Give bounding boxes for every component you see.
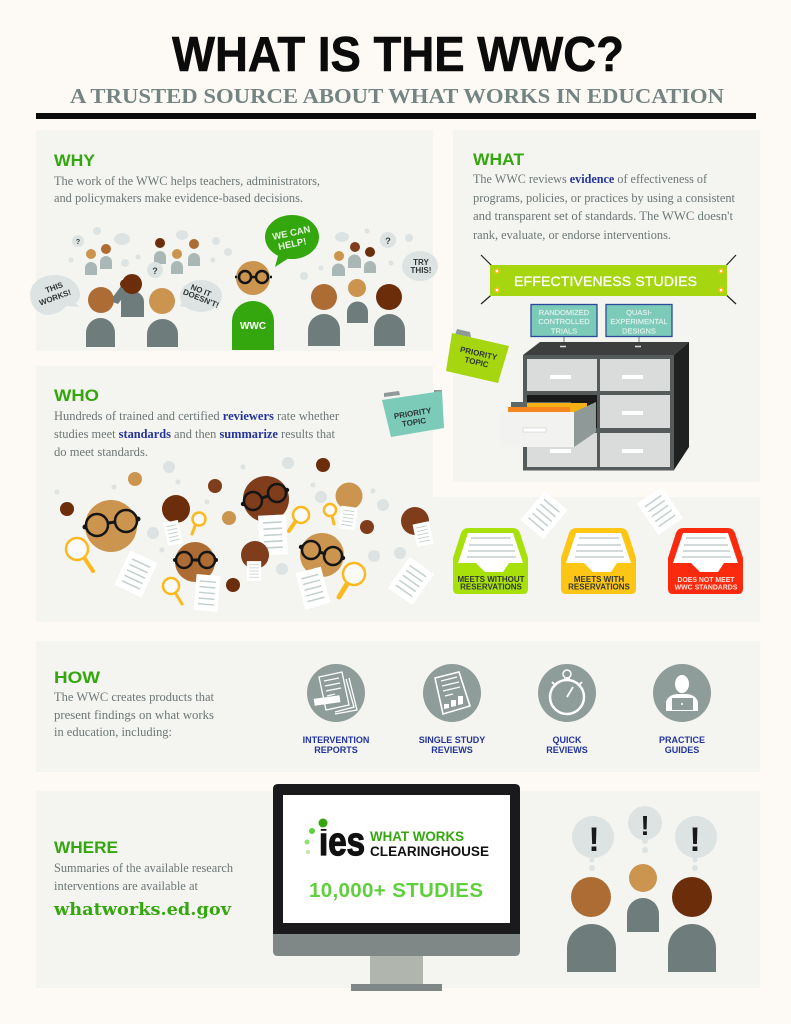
reviewer: large right xyxy=(296,533,365,609)
product: single study reviews: SINGLE STUDY xyxy=(419,735,485,745)
bubble: no it doesn't: DOESN'T! xyxy=(182,287,220,310)
bubble: this works: THIS xyxy=(44,280,65,295)
reviewer: lower left xyxy=(163,542,221,612)
how text: present findings on what works xyxy=(54,708,214,722)
what text: programs, policies, or practices by using a consistent xyxy=(473,191,736,205)
product: practice guides: GUIDES xyxy=(665,745,699,755)
reviewer: reading 1 xyxy=(162,495,206,546)
people with exclamation bubbles: ! xyxy=(689,821,701,859)
crowd: back left xyxy=(85,238,200,275)
folder: priority topic teal: PRIORITY xyxy=(393,406,433,421)
question bubbles: ? xyxy=(76,239,80,246)
where text: Summaries of the available research xyxy=(54,861,234,875)
title: WHAT IS THE WWC? xyxy=(172,28,624,82)
falling paper 2 xyxy=(637,487,683,535)
product: intervention reports: INTERVENTION xyxy=(303,735,369,745)
who text: do meet standards. xyxy=(54,445,148,459)
tray: does not meet standards xyxy=(668,528,743,594)
bubble: this works xyxy=(30,275,80,315)
logo: ies what works clearinghouse xyxy=(304,816,489,864)
label: quasi-experimental designs xyxy=(606,304,672,343)
background thought dots xyxy=(68,227,413,280)
falling paper 1 xyxy=(520,491,568,539)
label: randomized controlled trials: RANDOMIZED xyxy=(539,308,590,317)
who text: Hundreds of trained and certified reviewers rate whether xyxy=(54,409,340,423)
tray: does not meet standards: DOES NOT MEET xyxy=(677,577,735,584)
product: quick reviews xyxy=(538,664,596,755)
bubble: we can help xyxy=(265,215,319,267)
panel: who xyxy=(36,366,760,622)
heading: how: HOW xyxy=(54,668,101,687)
where text: interventions are available at xyxy=(54,879,199,893)
product: quick reviews: QUICK xyxy=(552,735,582,745)
tray: meets with reservations: MEETS WITH xyxy=(574,575,624,584)
label: quasi-experimental designs: DESIGNS xyxy=(622,326,656,336)
reviewers scatter dots xyxy=(54,457,406,575)
bubble: try this: THIS! xyxy=(411,266,431,275)
who text xyxy=(54,409,340,459)
reviewer: large left xyxy=(66,500,158,598)
monitor xyxy=(273,784,520,991)
heading: who: WHO xyxy=(54,386,99,405)
heading: what: WHAT xyxy=(473,150,525,169)
logo: ies what works clearinghouse: CLEARINGHOUSE xyxy=(370,844,489,859)
tray: does not meet standards: WWC STANDARDS xyxy=(675,584,738,592)
panel: where xyxy=(36,784,760,991)
label: quasi-experimental designs: QUASI- xyxy=(626,308,652,317)
what text: The WWC reviews evidence of effectiveness of xyxy=(473,172,708,186)
reviewer: lower middle xyxy=(241,541,269,581)
heading: where: WHERE xyxy=(54,838,118,857)
why text xyxy=(54,174,320,205)
bubble: no it doesn't: NO IT xyxy=(189,283,213,299)
tray: meets without reservations: MEETS WITHOUT xyxy=(457,575,525,584)
folder: priority topic lime: TOPIC xyxy=(464,355,490,370)
where text xyxy=(54,861,234,893)
product: intervention reports xyxy=(303,664,369,755)
logo: ies what works clearinghouse: WHAT WORKS xyxy=(370,829,464,844)
reviewer: reading 2 xyxy=(324,482,362,530)
product: single study reviews: REVIEWS xyxy=(431,745,473,755)
heading: why: WHY xyxy=(54,151,96,170)
bubble: try this: TRY xyxy=(413,258,430,267)
how text: in education, including: xyxy=(54,725,172,739)
folder: priority topic teal xyxy=(382,390,444,437)
how text xyxy=(54,690,215,739)
tray: meets with reservations: RESERVATIONS xyxy=(568,582,631,592)
bubble: we can help: HELP! xyxy=(277,236,308,253)
product: practice guides xyxy=(653,664,711,755)
product: single study reviews xyxy=(419,664,485,755)
question bubbles: ? xyxy=(152,266,158,276)
stat: 10,000+ studies: 10,000+ STUDIES xyxy=(309,879,483,902)
reviewer: reading 3 xyxy=(401,507,433,547)
panel: why xyxy=(30,130,438,351)
label: quasi-experimental designs: EXPERIMENTAL xyxy=(610,317,668,326)
tray: meets with reservations xyxy=(561,528,636,594)
people with exclamation bubbles xyxy=(567,806,717,972)
open drawer xyxy=(500,402,596,447)
label: randomized controlled trials: TRIALS xyxy=(551,326,577,336)
bubble: this works: WORKS! xyxy=(38,288,72,308)
tray: meets without reservations: RESERVATIONS xyxy=(460,582,523,592)
panel: what xyxy=(446,130,760,482)
product: intervention reports: REPORTS xyxy=(314,745,358,755)
what text: and transparent set of standards. The WWC doesn't xyxy=(473,209,734,223)
what text: rank, evaluate, or endorse interventions. xyxy=(473,228,671,242)
people with exclamation bubbles: ! xyxy=(640,810,650,841)
product: practice guides: PRACTICE xyxy=(659,735,705,745)
banner: effectiveness studies xyxy=(481,255,736,304)
folder: priority topic lime xyxy=(446,329,509,383)
bubble: we can help: WE CAN xyxy=(271,224,312,243)
tray: meets without reservations xyxy=(453,528,528,594)
people with exclamation bubbles: ! xyxy=(588,821,600,859)
banner: effectiveness studies: EFFECTIVENESS STUDIES xyxy=(514,273,697,289)
panel: how xyxy=(36,641,760,772)
crowd: right xyxy=(308,242,405,346)
reviewer: large centre xyxy=(241,476,309,556)
question bubbles xyxy=(72,232,396,278)
loose paper xyxy=(388,557,434,605)
person: wwc expert: WWC xyxy=(240,321,266,332)
title rule xyxy=(36,113,756,119)
question bubbles: ? xyxy=(385,236,391,246)
folder: priority topic teal: TOPIC xyxy=(401,416,427,429)
bubble: try this xyxy=(402,251,438,281)
folder: priority topic lime: PRIORITY xyxy=(459,345,499,362)
person: wwc expert xyxy=(232,261,274,350)
people arguing xyxy=(86,274,178,347)
logo: ies what works clearinghouse: ies xyxy=(319,820,365,864)
bubble: no it doesn't xyxy=(180,280,222,312)
how text: The WWC creates products that xyxy=(54,690,215,704)
product: quick reviews: REVIEWS xyxy=(546,745,588,755)
reviewers: small heads xyxy=(60,458,374,592)
subtitle: A TRUSTED SOURCE ABOUT WHAT WORKS IN EDUCATION xyxy=(70,84,724,108)
who text: studies meet standards and then summarize results that xyxy=(54,427,336,441)
what text xyxy=(473,172,736,242)
website link text: whatworks.ed.gov xyxy=(53,900,232,920)
label: randomized controlled trials xyxy=(531,304,597,343)
why text: and policymakers make evidence-based decisions. xyxy=(54,191,303,205)
why text: The work of the WWC helps teachers, administrators, xyxy=(54,174,320,188)
label: randomized controlled trials: CONTROLLED xyxy=(538,317,590,326)
filing cabinet xyxy=(500,342,689,470)
